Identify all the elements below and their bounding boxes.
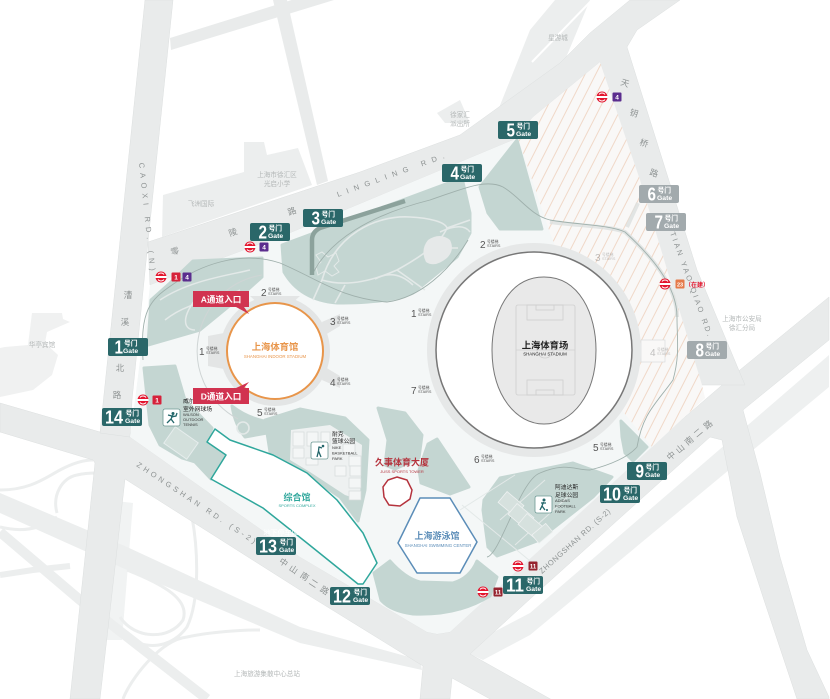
Nike label: 篮球公园	[332, 437, 355, 445]
stairs labels: STAIRS	[206, 351, 220, 355]
icon: football	[535, 496, 552, 513]
Juss sports tower: JUSS SPORTS TOWER	[380, 469, 424, 474]
stadium field oval	[492, 277, 596, 424]
indoor stadium: 上海体育馆	[252, 341, 298, 352]
Shanghai Stadium: SHANGHAI STADIUM	[523, 352, 567, 356]
Adidas label: 阿迪达斯	[555, 483, 578, 491]
place labels: 光启小学	[264, 179, 291, 188]
metro: lines 1 and 4: 4	[185, 274, 189, 282]
green parks	[144, 140, 647, 614]
gate 5: 号门	[516, 122, 530, 130]
gate 13: 号门	[280, 538, 293, 546]
gate 9	[627, 462, 667, 482]
stairs labels: STAIRS	[487, 244, 501, 248]
gate 10: 号门	[624, 486, 637, 494]
gate 4: 号门	[460, 164, 474, 174]
place labels: 徐家汇	[450, 110, 470, 119]
stair 4 outline	[641, 340, 665, 362]
road labels	[113, 77, 715, 597]
road labels: LINGLING RD.	[336, 150, 451, 199]
road labels: ZHONGSHAN RD. (S-2)	[537, 507, 613, 575]
Nike label: NIKE	[332, 445, 342, 450]
stairs labels: STAIRS	[268, 292, 282, 296]
Shanghai Stadium: 上海体育场	[522, 340, 568, 350]
road labels: 南	[298, 570, 311, 583]
icon: tennis	[163, 409, 180, 426]
stairs labels: 号楼梯	[206, 346, 218, 351]
gate 10: 10	[603, 484, 621, 504]
stairs labels: 号楼梯	[337, 377, 349, 382]
place labels: 地下停车库	[264, 528, 298, 537]
stairs labels: STAIRS	[337, 321, 351, 325]
Nike label: 耐克	[332, 430, 344, 438]
road labels: 二	[692, 426, 705, 439]
stairs labels: STAIRS	[418, 390, 432, 394]
metro: line 11 east	[512, 560, 538, 572]
road labels: 中	[665, 449, 678, 462]
road labels: 路	[113, 390, 122, 400]
road labels: 陵	[227, 226, 239, 238]
stairs labels: 2	[261, 288, 267, 299]
gate 1: 1	[114, 338, 123, 358]
stairs labels: STAIRS	[337, 382, 351, 386]
metro: line 11 west: 11	[495, 590, 502, 596]
metro: line 4 near gate 2: 4	[262, 244, 266, 252]
metro: line 11 east: 11	[530, 564, 537, 570]
road labels: TIAN YAO QIAO RD.	[668, 231, 715, 340]
road labels: 桥	[638, 137, 650, 149]
Nike label	[332, 430, 358, 461]
gate 4: 4	[450, 164, 459, 184]
gate 2: 2	[258, 222, 267, 242]
stairs labels: 号楼梯	[264, 407, 276, 412]
road labels: 溪	[121, 317, 130, 327]
gate 8	[687, 340, 727, 360]
gate 6: 6	[648, 184, 656, 204]
stairs labels: 号楼梯	[418, 308, 430, 313]
gate 5	[498, 120, 538, 140]
stairs labels: 1	[199, 347, 205, 358]
metro: line 4 north-east	[596, 92, 622, 102]
gate 12: 号门	[354, 588, 367, 596]
tennis label: TENNIS	[183, 422, 198, 427]
road labels: 钥	[628, 107, 640, 119]
gate 3	[303, 208, 343, 228]
stairs labels: 5	[257, 408, 263, 419]
gate 7: 7	[654, 212, 663, 232]
sports complex: SPORTS COMPLEX	[278, 503, 316, 508]
stairs labels: 号楼梯	[487, 239, 499, 244]
metro: line 23 under construction	[660, 278, 709, 290]
place labels: 飞洲国际	[188, 199, 215, 208]
gate 10	[600, 484, 640, 504]
road labels: 路	[648, 167, 660, 179]
road labels: 路	[286, 205, 298, 217]
gate 11: 号门	[526, 576, 540, 586]
gate 3: 号门	[322, 210, 335, 218]
stairs labels: STAIRS	[600, 447, 614, 451]
metro: line 4 near gate 2	[244, 242, 268, 252]
road labels: CAOXI RD. (N)	[137, 162, 158, 276]
tennis court	[164, 427, 198, 459]
tennis label: WILSON	[183, 412, 199, 417]
gate 1: 号门	[124, 338, 138, 348]
stairs labels	[199, 239, 671, 466]
gate 6	[639, 184, 679, 204]
road labels: ZHONGSHAN RD. (S-2)	[135, 460, 260, 547]
place labels: 徐汇分局	[729, 323, 756, 332]
road labels: 中	[277, 556, 290, 569]
road labels: 天	[619, 77, 631, 89]
D entrance: D通道入口	[201, 390, 241, 402]
gate 5: 5	[506, 120, 515, 140]
stairs labels: 号楼梯	[602, 252, 614, 257]
indoor stadium: SHANGHAI INDOOR STADIUM	[244, 354, 307, 359]
stairs labels: 6	[474, 455, 480, 466]
underground route lines	[142, 184, 678, 557]
gate 8: Gate	[705, 351, 720, 358]
road labels: 山	[674, 442, 687, 455]
gate 12: 12	[333, 586, 351, 606]
gate 2	[250, 222, 290, 242]
indoor stadium plaza	[208, 296, 340, 406]
road labels: 二	[307, 577, 320, 590]
Juss sports tower	[375, 456, 429, 506]
stairs labels: 号楼梯	[337, 316, 349, 321]
stairs labels: 5	[593, 443, 599, 454]
gate 3: 3	[312, 208, 320, 228]
gate 13: 13	[259, 536, 277, 556]
gate 9: 9	[636, 462, 644, 482]
stairs labels: 号楼梯	[418, 385, 430, 390]
stadium bowl	[436, 252, 632, 448]
gate 8: 8	[696, 340, 704, 360]
Adidas label	[555, 483, 578, 514]
swimming center	[398, 498, 477, 573]
Adidas label: 足球公园	[555, 491, 578, 499]
gate 2: 号门	[268, 224, 282, 232]
stairs labels: 3	[330, 317, 336, 328]
stairs labels: 4	[650, 348, 656, 359]
stairs labels: STAIRS	[418, 313, 432, 317]
Shanghai Stadium	[427, 243, 641, 457]
place labels: 上海市公安局	[722, 314, 762, 323]
stairs labels: STAIRS	[264, 412, 278, 416]
stairs labels: 1	[411, 309, 417, 320]
indoor stadium	[227, 303, 323, 399]
hatch route band	[550, 203, 677, 317]
gate 1: Gate	[123, 348, 138, 355]
gate 6: Gate	[657, 195, 672, 202]
road labels: 漕	[124, 290, 133, 300]
gate 4: Gate	[460, 174, 475, 181]
Adidas courts	[498, 492, 553, 543]
gate 8: 号门	[706, 342, 719, 350]
stairs labels: STAIRS	[657, 352, 671, 356]
gate 12: Gate	[353, 597, 368, 604]
Nike court ground	[290, 425, 362, 500]
stairs labels: 号楼梯	[657, 347, 669, 352]
gate 2: Gate	[268, 233, 283, 240]
metro: lines 1 and 4	[156, 272, 192, 282]
D entrance	[193, 382, 249, 404]
swimming center: 上海游泳馆	[414, 530, 460, 541]
gate 12	[330, 586, 370, 606]
gate 10: Gate	[623, 495, 638, 502]
place labels: 上海旅游集散中心总站	[234, 669, 300, 678]
stairs labels: STAIRS	[481, 459, 495, 463]
gate 14: Gate	[125, 418, 140, 425]
gate 5: Gate	[516, 131, 531, 138]
swimming center: SHANGHAI SWIMMING CENTER	[405, 543, 471, 548]
road labels: 山	[287, 563, 300, 576]
site base	[130, 65, 705, 634]
gate 11: 11	[506, 576, 524, 596]
paved patch	[423, 236, 452, 264]
stairs labels: 2	[480, 240, 486, 251]
hatched construction area	[517, 62, 705, 447]
gate 9: Gate	[645, 472, 660, 479]
Adidas label: PARK	[555, 509, 566, 514]
gate 11	[503, 576, 543, 596]
stairs labels: 4	[330, 378, 336, 389]
gate 9: 号门	[646, 462, 659, 472]
Adidas label: FOOTBALL	[555, 504, 577, 508]
sports complex: 综合馆	[283, 492, 311, 502]
gate 4	[442, 164, 482, 184]
A entrance: A通道入口	[201, 294, 241, 304]
walkway	[312, 201, 405, 275]
gate 14: 14	[105, 408, 123, 428]
metro: line 23 under construction: （在建）	[685, 281, 709, 289]
gate 14: 号门	[126, 408, 139, 418]
stairs labels: 号楼梯	[481, 454, 493, 459]
road labels: 路	[318, 584, 331, 597]
gate 3: Gate	[321, 219, 336, 226]
gate 13	[256, 536, 296, 556]
Nike courts	[293, 432, 361, 500]
stairs labels: 7	[411, 386, 417, 397]
Nike label: PARK	[332, 456, 343, 461]
football pitch	[516, 305, 575, 395]
stairs labels: 3	[595, 253, 601, 264]
metro: line 4 north-east: 4	[615, 94, 619, 102]
tennis label: 室外网球场	[183, 405, 212, 413]
gate 7	[646, 212, 686, 232]
road labels: 路	[702, 418, 715, 431]
road labels: 零	[169, 245, 181, 257]
gate 7: Gate	[664, 223, 679, 230]
place labels: 派出所	[450, 119, 470, 128]
stairs labels: STAIRS	[602, 257, 616, 261]
park paths	[160, 217, 570, 565]
metro: lines 1 and 4: 1	[174, 274, 178, 282]
place labels: 星游城	[548, 33, 568, 42]
icon: basketball	[311, 442, 328, 459]
tennis label	[183, 397, 212, 427]
gate 13: Gate	[279, 547, 294, 554]
gate 11: Gate	[526, 586, 541, 593]
stadium outer ring	[427, 243, 641, 457]
place labels: 华亭宾馆	[29, 340, 56, 349]
metro: line 23 under construction: 23	[677, 282, 683, 288]
stairs labels: 号楼梯	[600, 442, 612, 447]
stairs labels: 号楼梯	[268, 287, 280, 292]
sports complex	[207, 429, 377, 584]
tennis label: 威尔	[183, 397, 195, 405]
tennis label: OUTDOOR	[183, 417, 204, 422]
road labels: 南	[683, 434, 696, 447]
Juss sports tower: 久事体育大厦	[375, 456, 429, 468]
Nike label: BASKETBALL	[332, 450, 358, 456]
metro: line 1: 1	[155, 398, 159, 404]
gate 7: 号门	[664, 214, 678, 222]
metro: line 1	[138, 394, 162, 406]
road labels: 北	[116, 363, 125, 373]
indoor stadium ring path	[197, 275, 262, 419]
A entrance	[193, 291, 249, 314]
gate 1	[108, 338, 148, 358]
Adidas label: ADIDAS	[555, 498, 570, 503]
gate 6: 号门	[658, 186, 671, 194]
gate 14	[102, 408, 142, 428]
metro: line 11 west	[478, 586, 502, 598]
place labels: 上海市徐汇区	[257, 170, 297, 179]
